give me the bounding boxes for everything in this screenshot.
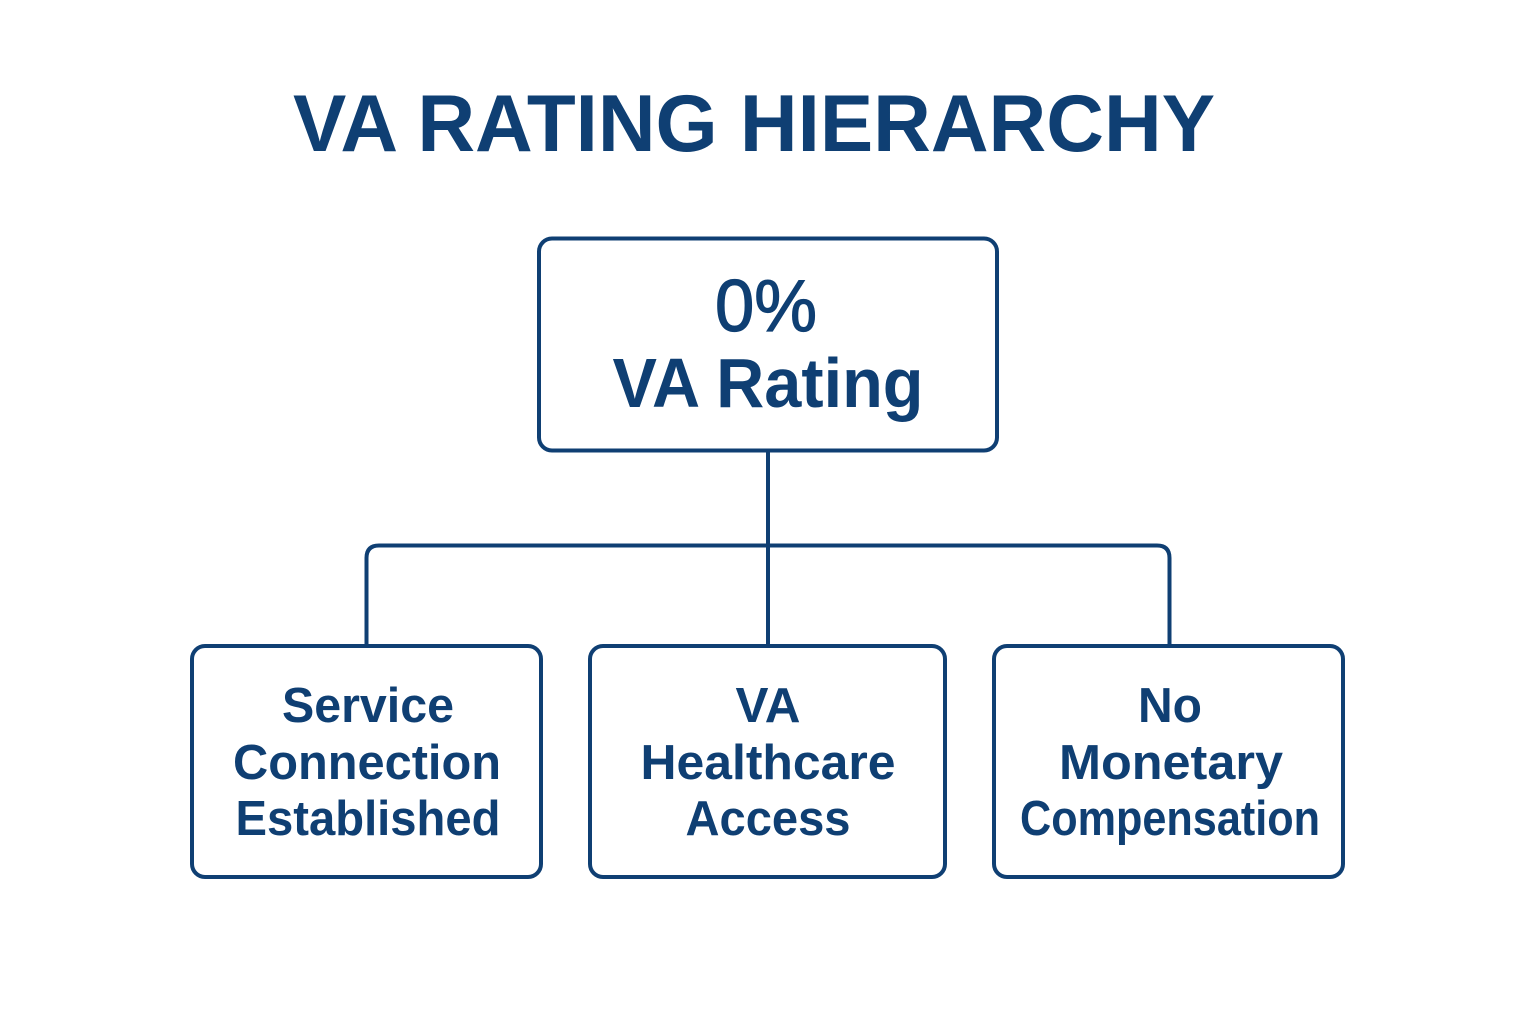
title: VA RATING HIERARCHY [293, 79, 1215, 169]
box: VA Healthcare Access [590, 646, 945, 877]
box: No Monetary Compensation: Monetary [1059, 736, 1283, 790]
connector: tree lines [366, 451, 1170, 645]
box: No Monetary Compensation: Compensation [1020, 792, 1320, 846]
box: 0% VA Rating [539, 238, 997, 450]
box: VA Healthcare Access: Healthcare [640, 736, 896, 790]
box: VA Healthcare Access: VA [736, 679, 800, 733]
box: 0% VA Rating: VA Rating [612, 344, 924, 422]
box: Service Connection Established: Service [282, 679, 454, 733]
box: No Monetary Compensation [994, 646, 1343, 877]
box: VA Healthcare Access: Access [686, 792, 850, 846]
box: Service Connection Established: Established [236, 792, 500, 846]
box: 0% VA Rating: 0% [715, 266, 817, 347]
box: No Monetary Compensation: No [1138, 679, 1202, 733]
box: Service Connection Established [192, 646, 541, 877]
box: Service Connection Established: Connection [233, 736, 501, 790]
